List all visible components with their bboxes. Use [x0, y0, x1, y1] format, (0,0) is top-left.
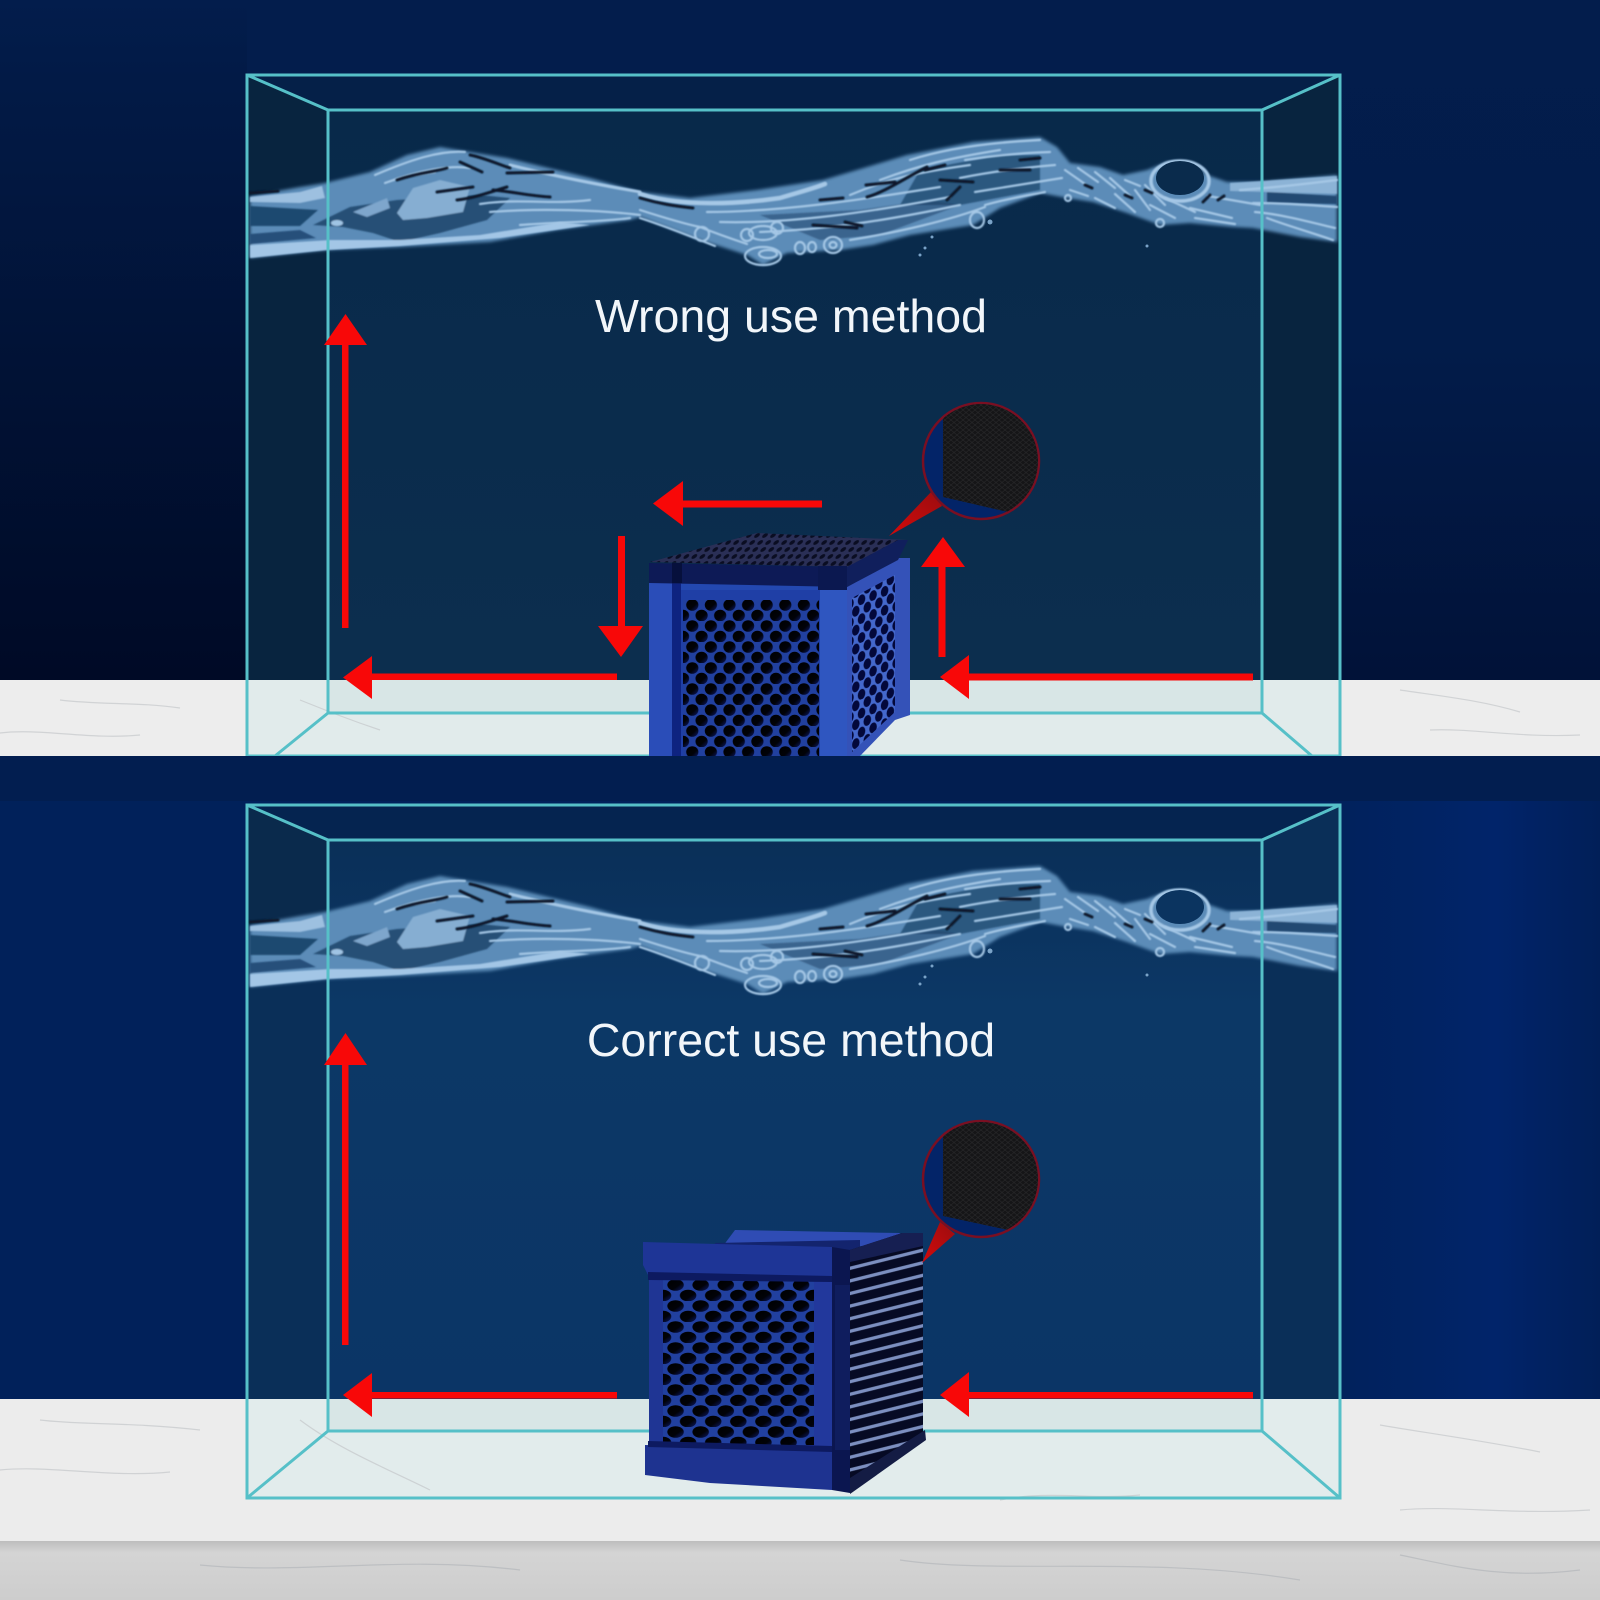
arrow: down	[598, 536, 643, 657]
callout: magnified filter mesh	[922, 1120, 1040, 1263]
panel: wrong use method	[0, 0, 1600, 756]
arrow: floor right	[940, 1372, 1253, 1417]
water surface	[250, 866, 1337, 994]
arrow: long vertical	[324, 314, 367, 628]
callout: magnified filter mesh	[889, 402, 1040, 536]
marble floor	[0, 680, 1600, 756]
arrow: floor right	[940, 655, 1253, 699]
cube: wrong placement	[649, 533, 910, 756]
arrow: floor left	[343, 656, 617, 699]
water surface	[250, 137, 1337, 265]
arrow: top left	[653, 481, 822, 526]
arrow: long vertical	[324, 1033, 367, 1345]
arrow: up	[921, 537, 965, 657]
marble table	[0, 1399, 1600, 1600]
arrow: floor left	[343, 1373, 617, 1417]
title: correct use method: Correct use method	[587, 1014, 995, 1066]
cube: correct placement	[643, 1230, 926, 1494]
background	[0, 0, 1600, 756]
background	[0, 756, 1600, 1400]
title: wrong use method: Wrong use method	[595, 290, 987, 342]
panel: correct use method	[0, 756, 1600, 1600]
tank frame	[247, 75, 1340, 756]
tank frame	[247, 805, 1340, 1498]
